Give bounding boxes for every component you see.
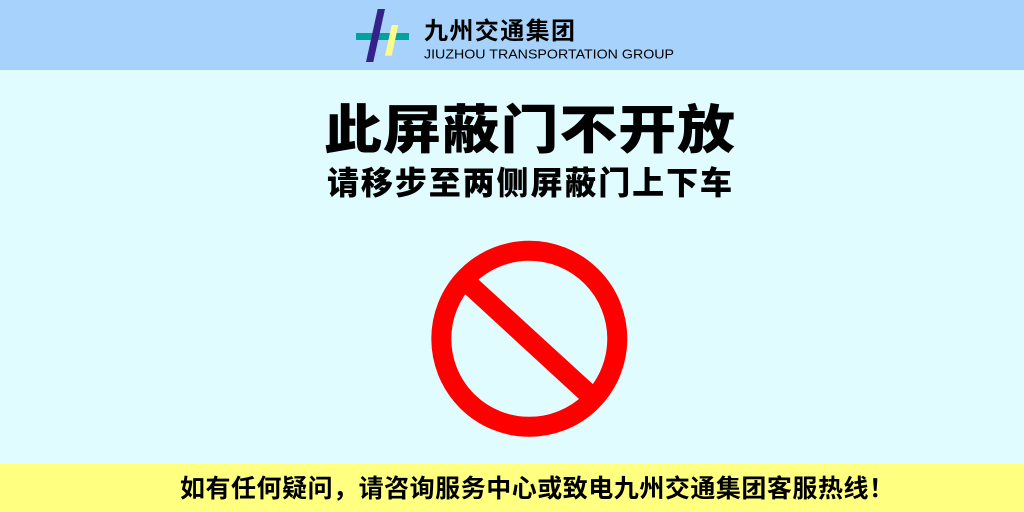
header band bbox=[0, 0, 1024, 70]
company name Chinese: 九州交通集团 bbox=[424, 17, 575, 45]
main heading: 此屏蔽门不开放 bbox=[324, 100, 735, 159]
subheading: 请移步至两侧屏蔽门上下车 bbox=[327, 165, 732, 201]
footer notice text: 如有任何疑问，请咨询服务中心或致电九州交通集团客服热线！ bbox=[180, 474, 894, 503]
icon: company logo bbox=[356, 9, 409, 62]
footer band bbox=[0, 464, 1024, 512]
icon: prohibition sign bbox=[441, 251, 617, 427]
company name English: JIUZHOU TRANSPORTATION GROUP bbox=[424, 46, 674, 62]
